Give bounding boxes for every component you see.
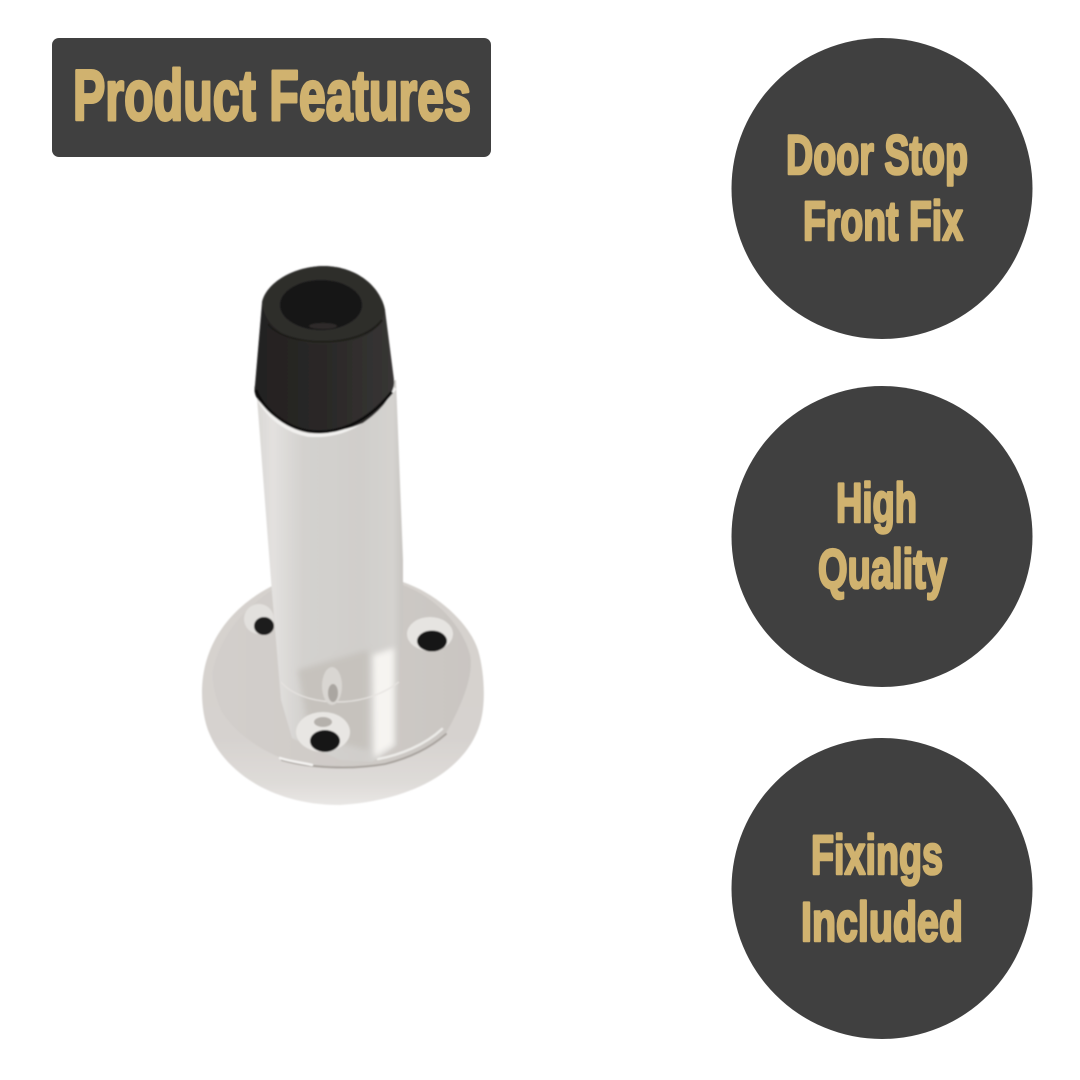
product image: door stop <box>202 266 484 805</box>
base plate edge highlights <box>280 729 446 767</box>
right screw hole <box>407 617 453 652</box>
collar nub <box>322 667 342 705</box>
circle: high quality <box>732 386 1032 687</box>
collar seam <box>281 682 399 702</box>
rim front shading <box>268 320 382 342</box>
title banner <box>52 38 491 157</box>
label: front fix: Front Fix <box>803 189 963 252</box>
tube bright reflection <box>373 648 394 758</box>
label: door stop: Door Stop <box>786 123 968 186</box>
left screw hole <box>244 604 274 635</box>
metal tube <box>256 380 403 762</box>
label: quality: Quality <box>818 537 947 600</box>
silver ring under rubber <box>258 388 395 435</box>
label: included: Included <box>801 890 963 953</box>
label: high: High <box>836 471 917 534</box>
base plate top face <box>213 585 471 768</box>
label: fixings: Fixings <box>811 823 943 886</box>
title text: Product Features <box>73 57 471 136</box>
circle: fixings included <box>732 738 1032 1039</box>
rubber hole <box>280 280 362 330</box>
circle: door stop front fix <box>732 38 1032 339</box>
rubber rim <box>262 266 385 344</box>
tube lower shading <box>298 650 368 750</box>
rubber tip <box>255 266 394 432</box>
rubber bottom edge <box>256 390 392 432</box>
front screw hole <box>296 712 350 752</box>
base plate rim <box>202 582 484 805</box>
